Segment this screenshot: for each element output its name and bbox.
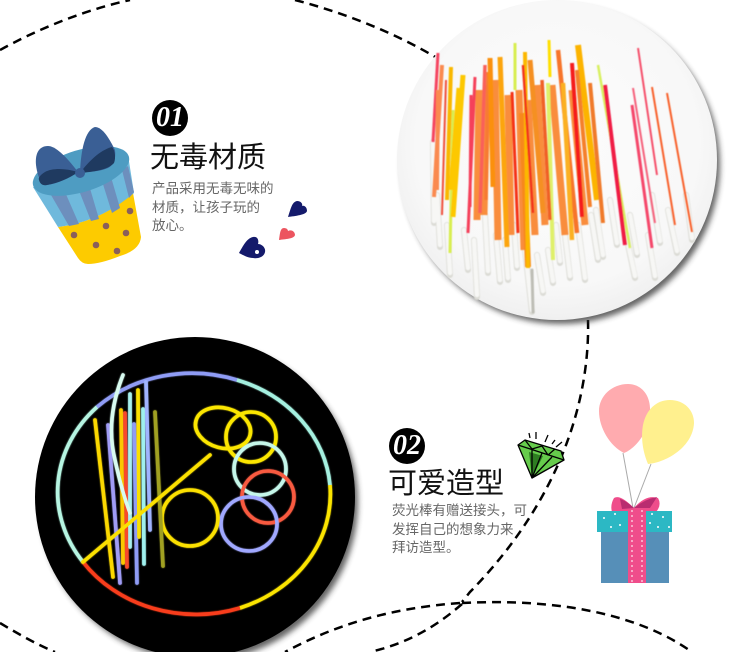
text block: feature 1: 产品采用无毒无味的 bbox=[152, 181, 274, 196]
bow bbox=[36, 146, 78, 185]
yellow balloon bbox=[642, 400, 694, 464]
gift bow bbox=[611, 497, 660, 512]
photo: glowing sticks and rings on black circle bbox=[35, 337, 358, 652]
small rings bbox=[162, 401, 294, 551]
badge: 01: 01 bbox=[156, 102, 184, 133]
text block: feature 2 bbox=[392, 503, 527, 555]
dots bbox=[71, 208, 133, 254]
badge: 02 bbox=[389, 428, 425, 464]
text block: feature 2: 拜访造型。 bbox=[392, 540, 460, 555]
text block: feature 1 bbox=[152, 181, 274, 233]
text block: feature 1: 放心。 bbox=[152, 218, 192, 233]
text block: feature 1: 材质，让孩子玩的 bbox=[152, 200, 260, 214]
coloured sticks bbox=[433, 40, 692, 268]
straight sticks bbox=[83, 375, 210, 583]
badge: 01 bbox=[152, 100, 188, 136]
striped sleeve bbox=[33, 155, 134, 227]
text block: feature 2: 发挥自己的想象力来 bbox=[392, 522, 514, 536]
badge: 02: 02 bbox=[393, 430, 421, 461]
heading: 可爱造型: 可爱造型 bbox=[388, 468, 504, 500]
icon: green diamond bbox=[518, 432, 564, 478]
strings bbox=[623, 453, 651, 508]
translucent tube ends bbox=[433, 142, 692, 312]
icon: balloons with gift box bbox=[597, 384, 694, 583]
pink balloon bbox=[599, 384, 650, 453]
box body bbox=[601, 532, 669, 583]
icon: gift cup bbox=[27, 127, 141, 264]
yellow base bbox=[58, 193, 141, 264]
large hoop bbox=[58, 373, 330, 614]
box lid bbox=[597, 511, 672, 532]
text block: feature 2: 荧光棒有赠送接头，可 bbox=[392, 503, 527, 518]
heading: 无毒材质: 无毒材质 bbox=[150, 142, 266, 174]
lid bbox=[27, 136, 135, 206]
photo: glow stick bundle on white circle bbox=[397, 0, 720, 324]
icon: hearts bbox=[239, 201, 307, 258]
ribbon bbox=[628, 509, 646, 583]
